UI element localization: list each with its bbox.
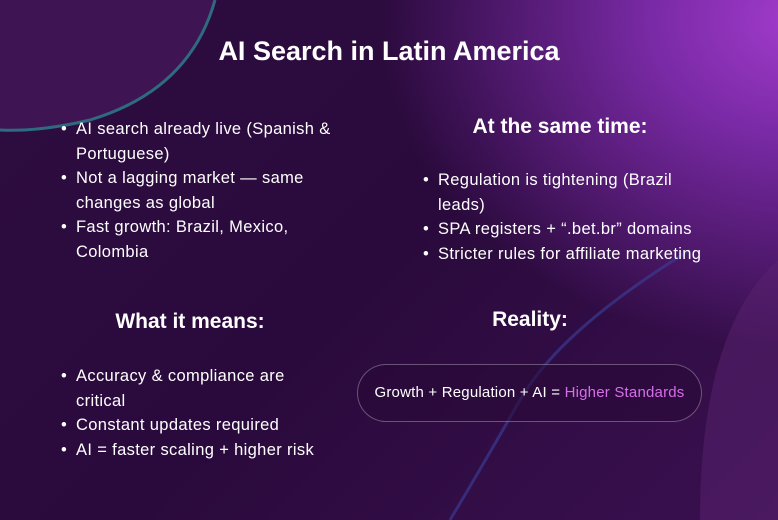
panel: overview bullets: Fast growth: Brazil, Mexico, Colombia	[76, 218, 288, 260]
heading: what it means: What it means:	[115, 310, 265, 333]
heading: reality: Reality:	[492, 308, 568, 331]
panel: meaning bullets: AI = faster scaling + higher risk	[76, 440, 314, 458]
panel: meaning bullets: Accuracy & compliance are critical	[76, 367, 285, 410]
callout: equation pill: Growth + Regulation + AI = Higher Standards	[374, 384, 685, 401]
title: AI Search in Latin America	[218, 36, 560, 66]
panel: overview bullets: AI search already live (Spanish & Portuguese)	[76, 120, 331, 162]
panel: regulation bullets: Stricter rules for affiliate marketing	[438, 244, 701, 262]
panel: regulation bullets: SPA registers + “.bet.br” domains	[438, 220, 692, 238]
panel: meaning bullets: Constant updates required	[76, 416, 279, 434]
callout: equation pill	[357, 364, 702, 422]
heading: at the same time: At the same time:	[472, 115, 648, 138]
panel: overview bullets	[62, 120, 331, 260]
panel: overview bullets: Not a lagging market — same changes as global	[76, 169, 304, 212]
panel: regulation bullets: Regulation is tightening (Brazil leads)	[438, 171, 672, 214]
panel: meaning bullets	[62, 367, 314, 458]
panel: regulation bullets	[424, 171, 701, 262]
